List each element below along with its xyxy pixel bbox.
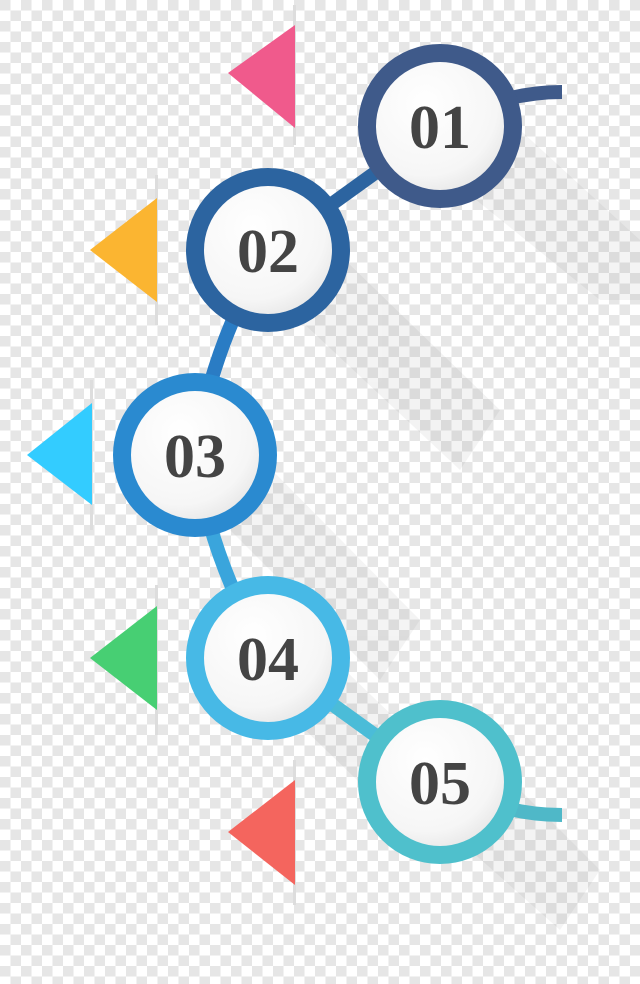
circle 05: 05 (409, 750, 471, 818)
triangle: red (228, 760, 296, 905)
shadows (225, 130, 640, 930)
circle 05 (367, 709, 513, 855)
circle 01: 01 (409, 94, 471, 162)
triangle: pink (228, 5, 296, 145)
circle 03: 03 (164, 423, 226, 491)
connector path (195, 92, 562, 815)
circle 01 (367, 53, 513, 199)
circle 02 (195, 177, 341, 323)
triangle: orange (90, 175, 158, 325)
circle 03 (122, 382, 268, 528)
circle 04 (195, 585, 341, 731)
circle 04: 04 (237, 626, 299, 694)
circle 02: 02 (237, 218, 299, 286)
triangle: green (90, 585, 158, 735)
triangle: blue (27, 380, 93, 530)
